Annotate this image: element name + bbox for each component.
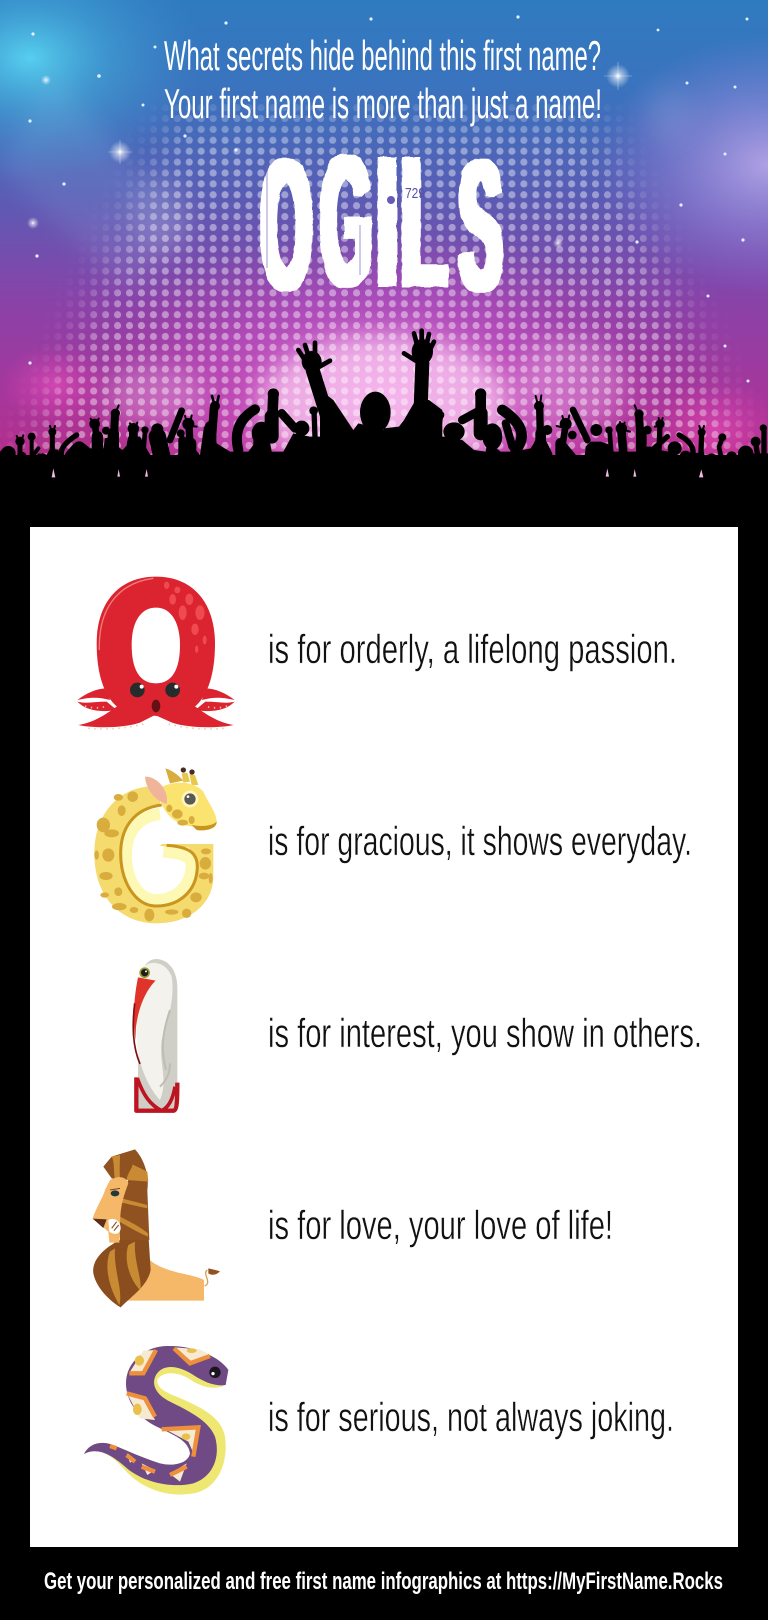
row S (84, 1346, 674, 1495)
header concert background (0, 0, 768, 455)
title: name OGILS: O (261, 121, 312, 329)
icon: snake letter S (84, 1346, 228, 1495)
icon: octopus letter O (77, 577, 235, 729)
panel: white card (30, 527, 738, 1547)
crowd: left half (0, 343, 391, 490)
title: intro lines (164, 32, 602, 127)
icon: lion letter L (93, 1149, 220, 1307)
gaps in crowd (52, 468, 148, 477)
title: name OGILS (261, 117, 502, 330)
row G (94, 767, 692, 923)
title: name OGILS: I (376, 119, 398, 326)
icon: ibis letter I (133, 959, 177, 1111)
title: name OGILS: S (460, 123, 502, 330)
crowd silhouette (0, 331, 768, 527)
row L (93, 1149, 613, 1307)
gaps in crowd (606, 468, 703, 477)
crowd: right half (384, 331, 768, 490)
icon: giraffe letter G (94, 767, 217, 923)
stars (27, 15, 750, 383)
row I (133, 959, 702, 1111)
text: letter L: is for love, your love of life! (268, 1202, 613, 1248)
title: name OGILS: L (401, 119, 447, 327)
row O (77, 577, 677, 729)
title: name OGILS: 729 (405, 185, 425, 202)
title: name OGILS: G (321, 117, 372, 325)
